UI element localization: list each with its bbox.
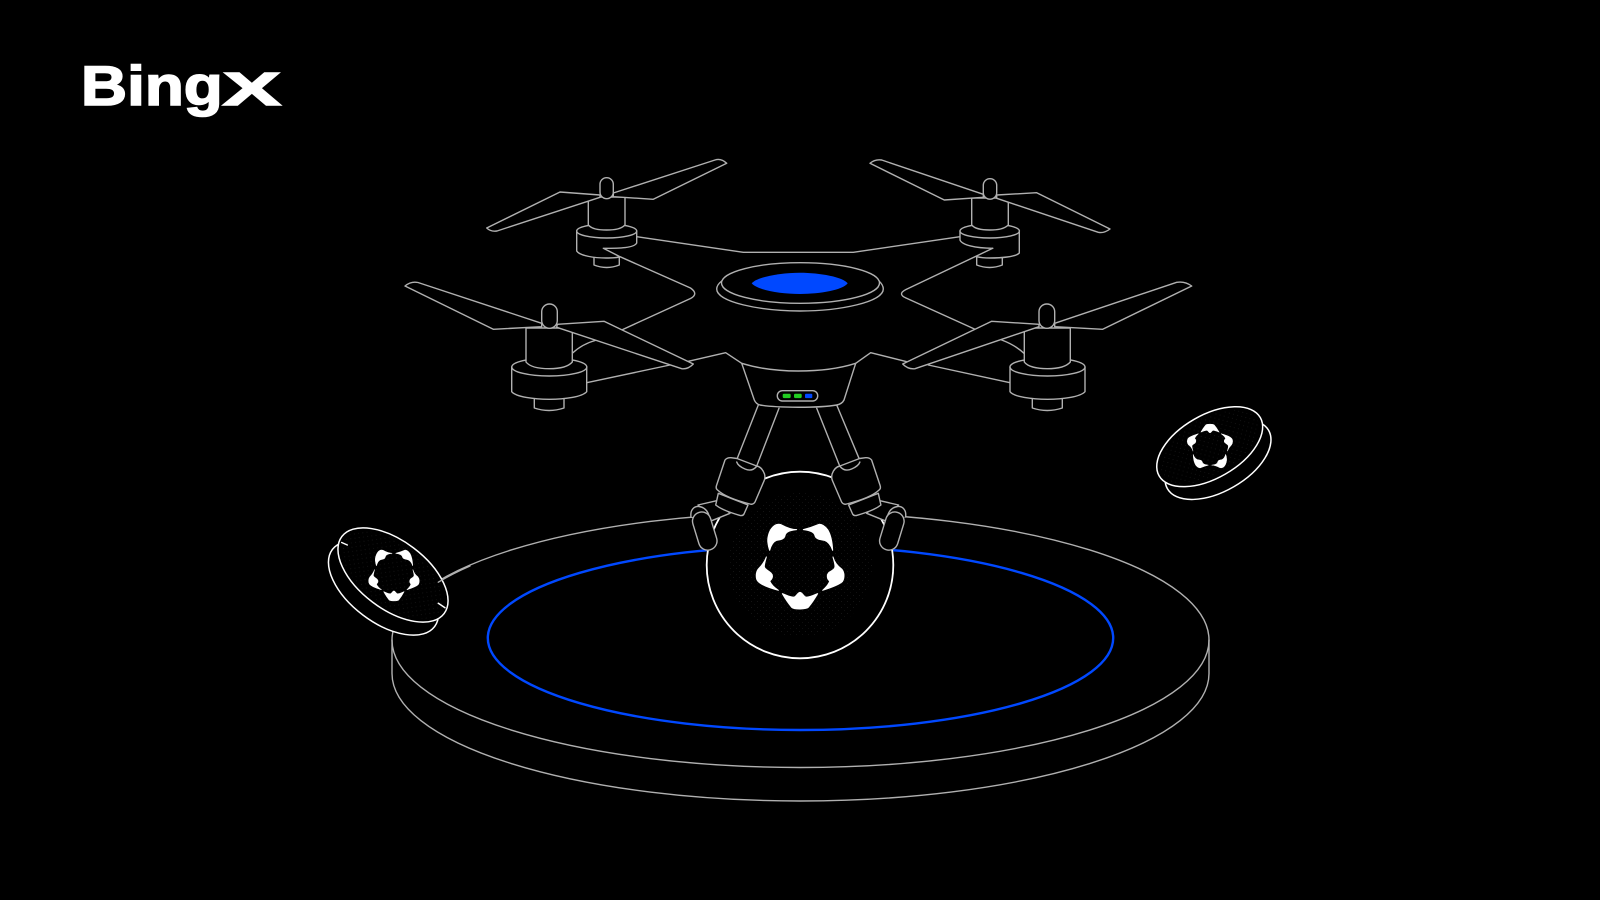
rotor: rear right [870,160,1110,329]
legs [737,405,859,467]
coin: left [312,509,470,654]
coin logo [1187,424,1233,468]
claw: right [832,458,906,552]
platform: round base [392,512,1209,801]
drone arms [572,237,1024,383]
coin: right [1143,390,1284,516]
battery indicator [777,391,818,401]
logo: BingX wordmark: Bing [81,54,223,117]
logo mark: five petals [756,524,844,609]
rotor: front left [405,282,693,410]
rotor: rear left [487,159,727,330]
rotor: front right [903,282,1192,410]
drone [405,159,1192,552]
drone body [742,363,856,407]
blue light [752,273,848,294]
central sphere with logo [707,472,893,658]
dome with blue light [717,263,883,311]
coin logo [369,550,419,601]
claw: left [690,458,765,552]
blue orbit ring [488,546,1113,730]
logo: BingX wordmark: X [223,63,281,115]
